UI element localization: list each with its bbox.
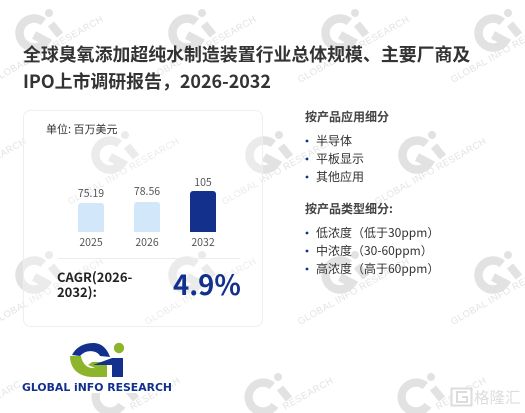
- title: IPO上市调研报告，2026-2032: [23, 68, 271, 94]
- bar chart: [78, 175, 216, 250]
- bar chart: 78.56: [134, 184, 160, 199]
- text block: by application: 按产品应用细分: [305, 108, 389, 125]
- bar chart: 75.19: [78, 186, 104, 201]
- badge: Gelonghui watermark: 格隆汇: [474, 386, 521, 408]
- title: [23, 41, 470, 94]
- text block: by application: 半导体: [316, 132, 352, 149]
- text block: by type: 按产品类型细分:: [305, 200, 393, 217]
- text block: by application: 其他应用: [316, 168, 364, 185]
- text block: by type: 中浓度（30-60ppm）: [316, 242, 433, 259]
- text block: by type: [305, 200, 439, 277]
- watermark pattern: GLOBAL INFO RESEARCH: [143, 256, 258, 328]
- logo: Global Info Research: GLOBAL iNFO RESEARCH: [22, 381, 172, 394]
- logo: Global Info Research: [20, 340, 172, 394]
- watermark pattern: RESEARCH: [128, 375, 182, 413]
- bar chart: 2025: [79, 235, 103, 250]
- text block: by application: [305, 108, 389, 185]
- watermark pattern: RESEARCH: [434, 375, 488, 413]
- watermark pattern: GLOBAL INFO RESEARCH: [296, 14, 411, 86]
- title: 全球臭氧添加超纯水制造装置行业总体规模、主要厂商及: [23, 41, 470, 67]
- CAGR value: 4.9%: [173, 263, 241, 303]
- watermark pattern: GLOBAL INFO RESEARCH: [220, 136, 335, 208]
- text block: by application: 平板显示: [316, 150, 364, 167]
- watermark pattern: GLOBAL INFO RESEARCH: [143, 14, 258, 86]
- bar chart: 2026: [135, 235, 159, 250]
- CAGR label: CAGR(2026-: [57, 267, 132, 286]
- watermark pattern: RESEARCH: [281, 375, 335, 413]
- CAGR label: 2032):: [57, 282, 97, 301]
- bar chart: 2032: [191, 235, 215, 250]
- watermark pattern: GLOBAL INFO RESEARCH: [296, 256, 411, 328]
- panel: market size card: [24, 110, 262, 326]
- watermark pattern: GLOBAL INFO RESEARCH: [373, 136, 488, 208]
- watermark pattern: GLOBAL INFO RESEARCH: [66, 136, 181, 208]
- unit label: 单位: 百万美元: [46, 121, 118, 137]
- text block: by type: 低浓度（低于30ppm）: [316, 224, 439, 241]
- text block: by type: 高浓度（高于60ppm）: [316, 260, 439, 277]
- badge: Gelonghui watermark: [452, 386, 521, 408]
- bar chart: 105: [194, 175, 212, 190]
